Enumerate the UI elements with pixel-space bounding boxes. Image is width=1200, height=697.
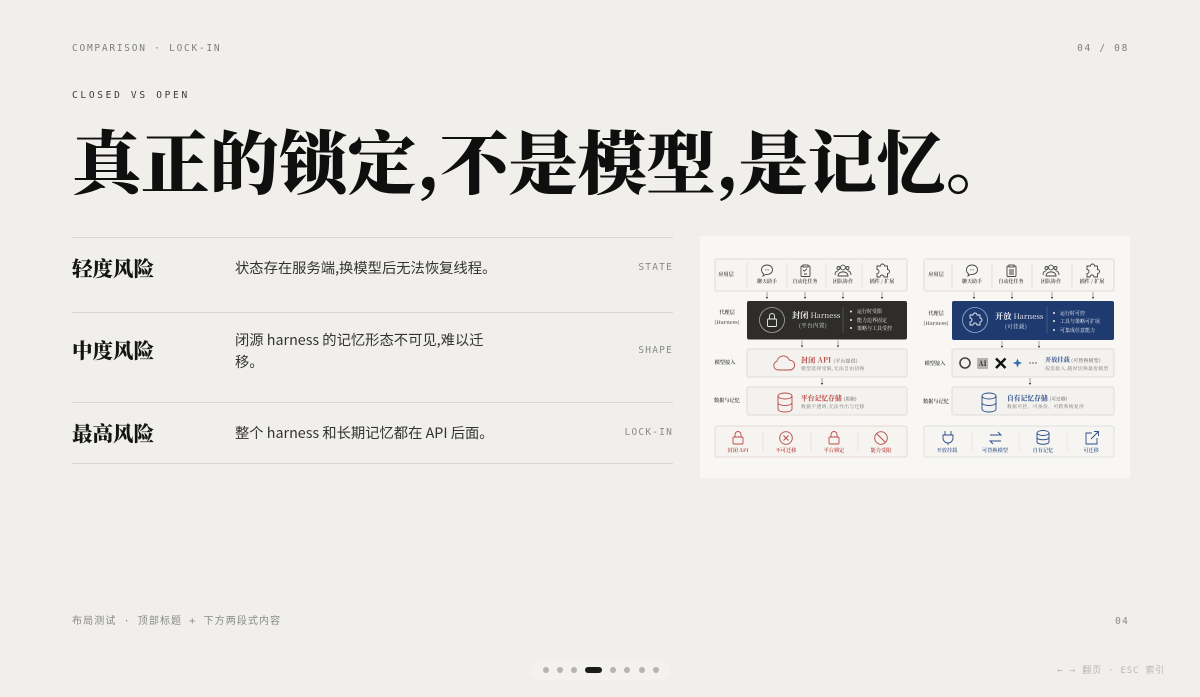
- eyebrow: CLOSED VS OPEN: [72, 90, 190, 101]
- risk row: highest: 最高风险: [72, 417, 154, 447]
- open benefit strip: 可替换模型: [982, 446, 1008, 454]
- own memory box: 数据可控、可备份、可跨系统复用: [1007, 403, 1084, 410]
- open mount box: AI: [978, 359, 987, 369]
- closed risk strip: 不可迁移: [776, 446, 797, 454]
- layer labels: (Harness): [923, 320, 949, 327]
- footer page number: 04: [1115, 616, 1129, 627]
- open benefit strip: 可迁移: [1083, 446, 1100, 454]
- own memory box: [952, 387, 1114, 415]
- open mount box: [952, 349, 1114, 377]
- app layer box: 自动化任务: [792, 278, 818, 285]
- closed column: [714, 259, 907, 457]
- layer labels: 模型接入: [715, 358, 736, 366]
- closed risk strip: [715, 426, 907, 457]
- dark harness block: (平台内置): [799, 322, 827, 330]
- panel: risk list: [72, 237, 673, 464]
- layer labels: 应用层: [718, 270, 735, 278]
- open mount box: 开放挂载 (可替换模型): [1045, 355, 1101, 364]
- blue harness block: 开放 Harness: [995, 311, 1044, 322]
- platform memory box: 平台记忆存储 (黑箱): [801, 392, 857, 402]
- title: 真正的锁定,不是模型,是记忆。: [72, 109, 1014, 208]
- app layer box: 自动化任务: [998, 278, 1024, 285]
- arrows: [766, 292, 883, 385]
- open benefit strip: 开放挂载: [937, 446, 958, 454]
- platform memory box: 数据不透明,无法导出与迁移: [801, 403, 865, 410]
- pagination dots: [531, 660, 670, 680]
- blue harness block: (可挂载): [1005, 322, 1027, 330]
- dark harness block: 能力边界固定: [857, 317, 887, 324]
- open benefit strip: [924, 426, 1114, 457]
- diagram: closed vs open harness: [714, 258, 1114, 458]
- layer labels: 代理层: [928, 309, 945, 317]
- layer labels: [923, 270, 950, 405]
- risk row: light: 状态存在服务端,换模型后无法恢复线程。: [235, 257, 496, 278]
- open benefit strip: 自有记忆: [1033, 446, 1054, 454]
- risk row: medium: [72, 329, 673, 372]
- open mount box: 按需接入,随时切换最优模型: [1045, 365, 1109, 372]
- risk row: highest: LOCK-IN: [625, 427, 673, 438]
- app layer box: 团队协作: [833, 278, 853, 285]
- risk row: medium: SHAPE: [638, 345, 673, 356]
- closed risk strip: 封闭 API: [728, 446, 748, 454]
- dark harness block: [747, 301, 907, 340]
- layer labels: [714, 270, 741, 404]
- open column: [923, 259, 1114, 457]
- closed risk strip: 能力受限: [871, 446, 892, 454]
- closed API box: 封闭 API (平台提供): [801, 356, 858, 366]
- dark harness block: 封闭 Harness: [792, 310, 841, 321]
- risk row: medium: 闭源 harness 的记忆形态不可见,难以迁移。: [235, 329, 484, 372]
- closed risk strip: 平台锁定: [824, 446, 845, 454]
- keyboard hint: ← → 翻页 · ESC 索引: [1057, 666, 1165, 676]
- layer labels: (Harness): [714, 319, 740, 326]
- platform memory box: [747, 387, 907, 415]
- own memory box: 自有记忆存储 (可迁移): [1007, 392, 1068, 402]
- app layer box: 团队协作: [1041, 278, 1061, 285]
- closed API box: [747, 349, 907, 377]
- blue harness block: 运行时可控: [1060, 310, 1085, 317]
- risk row: medium: 中度风险: [72, 334, 154, 364]
- blue harness block: 工具与策略可扩展: [1060, 318, 1100, 325]
- app layer box: 插件 / 扩展: [1080, 278, 1104, 285]
- arrows: [973, 292, 1094, 385]
- section label: COMPARISON · LOCK-IN: [72, 43, 221, 54]
- blue harness block: 可集成任意能力: [1060, 327, 1095, 334]
- closed API box: 模型选择受限,无法自由切换: [801, 365, 865, 372]
- risk row: highest: 整个 harness 和长期记忆都在 API 后面。: [235, 422, 494, 443]
- app layer box: 聊天助手: [757, 278, 777, 285]
- layer labels: 应用层: [928, 270, 945, 278]
- app layer box: [924, 259, 1114, 291]
- risk row: light: [72, 252, 673, 282]
- risk row: light: 轻度风险: [72, 252, 154, 282]
- layer labels: 数据与记忆: [714, 396, 741, 404]
- risk row: light: STATE: [638, 262, 673, 273]
- app layer box: [715, 259, 907, 291]
- layer labels: 模型接入: [925, 359, 946, 367]
- risk row: highest: [72, 417, 673, 447]
- layer labels: 代理层: [719, 308, 736, 316]
- blue harness block: [952, 301, 1114, 340]
- footer note: 布局测试 · 顶部标题 + 下方两段式内容: [72, 616, 281, 627]
- layer labels: 数据与记忆: [923, 397, 950, 405]
- dark harness block: 运行时受限: [857, 308, 882, 315]
- page counter: 04 / 08: [1077, 43, 1129, 54]
- app layer box: 聊天助手: [962, 278, 982, 285]
- app layer box: 插件 / 扩展: [870, 278, 894, 285]
- dark harness block: 策略与工具受控: [857, 325, 892, 332]
